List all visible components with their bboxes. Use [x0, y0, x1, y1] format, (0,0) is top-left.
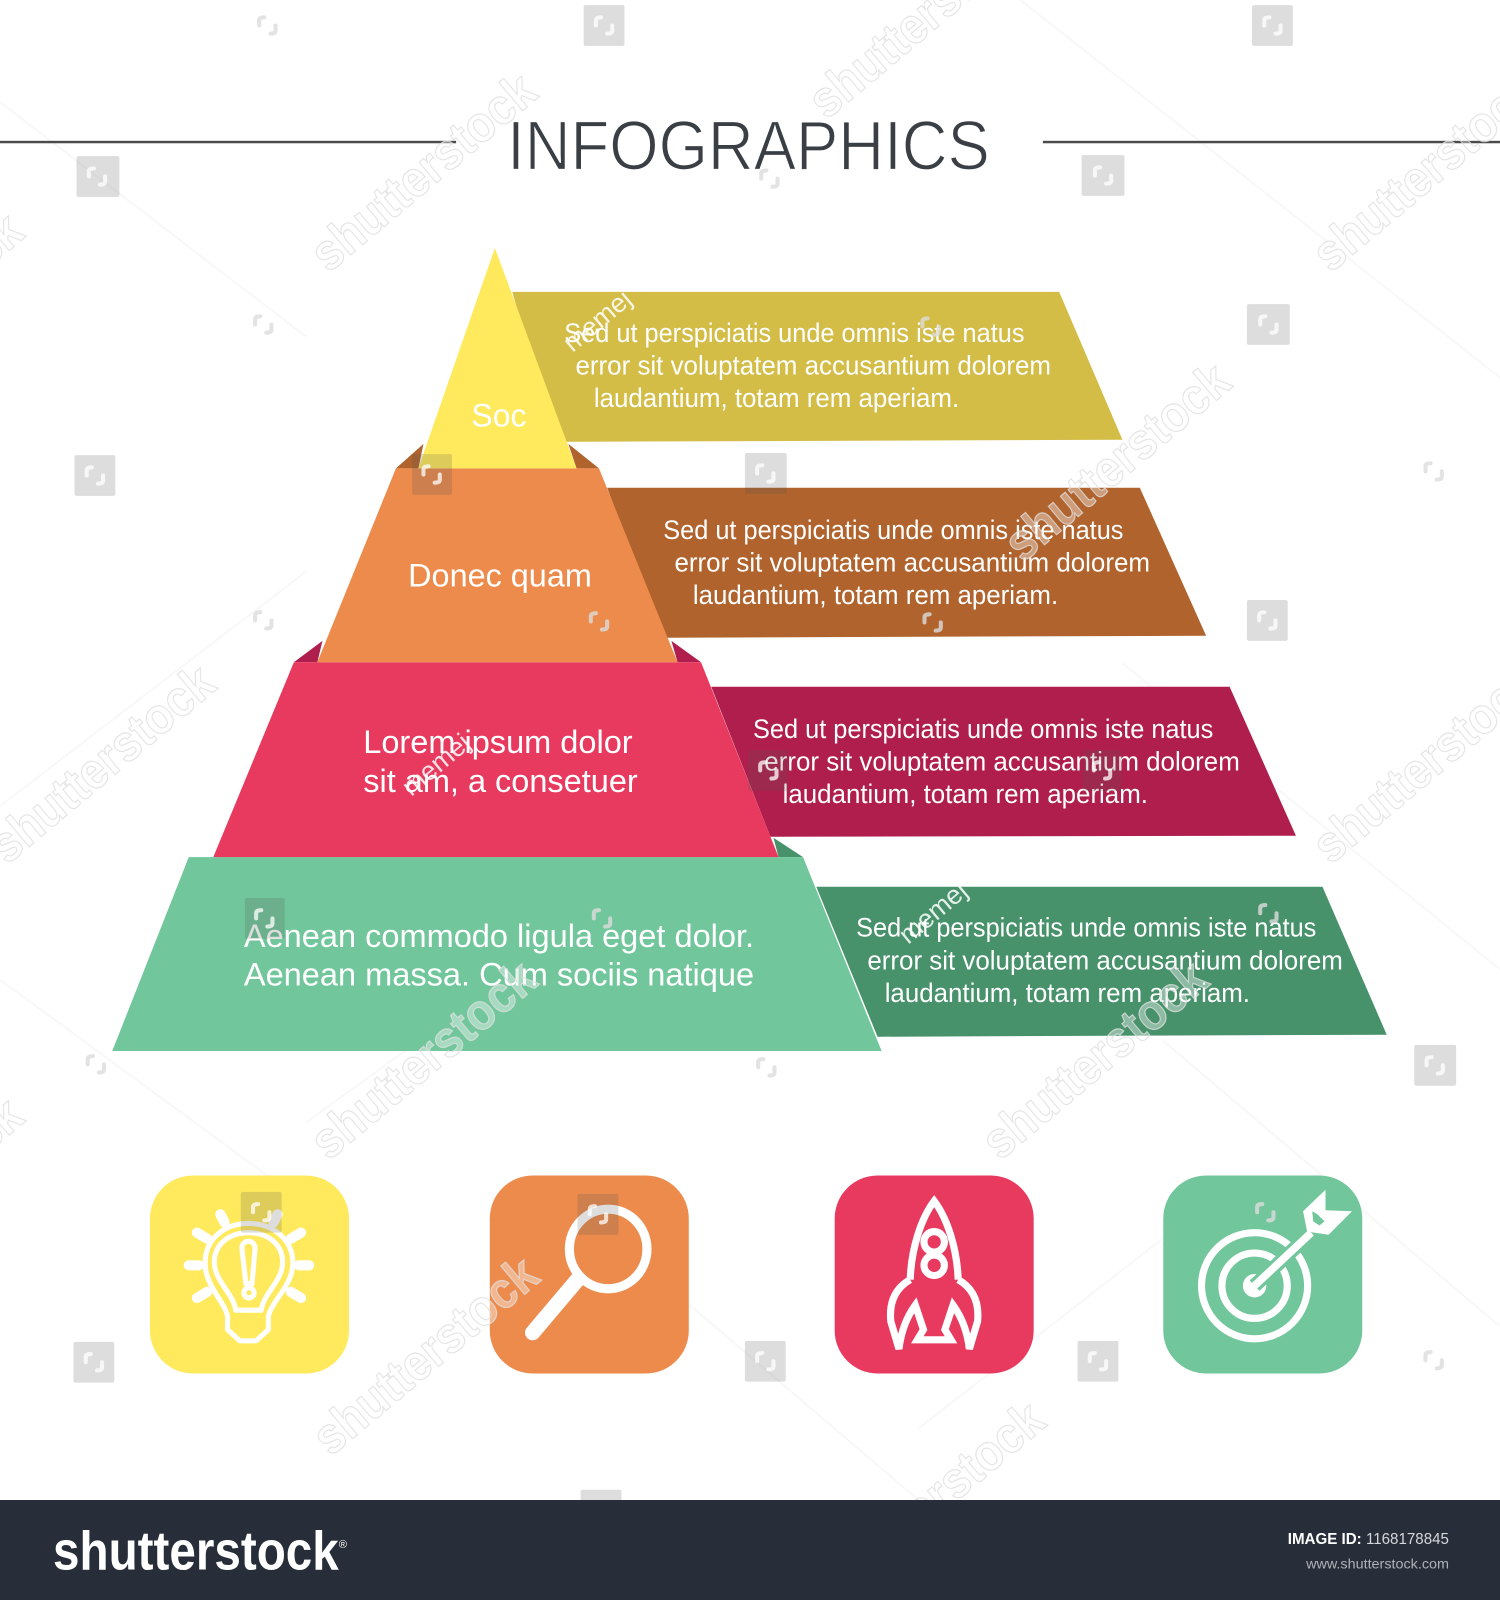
panel: band 3 crimson: Sed ut perspiciatis unde omnis iste natus	[753, 714, 1213, 744]
pyramid chart	[112, 248, 1387, 1051]
footer url: www.shutterstock.com	[1305, 1556, 1449, 1572]
pyramid level 2 orange	[317, 444, 678, 662]
panel: band 4 green: Sed ut perspiciatis unde omnis iste natus	[856, 913, 1316, 943]
footer logo: shutterstock	[53, 1519, 339, 1581]
panel: band 1 olive	[512, 292, 1122, 442]
title rule right	[1043, 141, 1500, 143]
watermark overlay: shutterstock	[299, 949, 547, 1170]
pyramid level 3 red	[213, 641, 779, 857]
footer image id: IMAGE ID: 1168178845	[1288, 1531, 1449, 1548]
icon: magnifier	[490, 1176, 689, 1373]
panel: band 4 green	[816, 887, 1387, 1037]
panel: band 3 crimson: error sit voluptatem accusantium dolorem	[764, 746, 1240, 776]
pyramid level 3 red: sit am, a consetuer	[363, 762, 638, 799]
panel: band 2 brown: Sed ut perspiciatis unde omnis iste natus	[663, 515, 1123, 545]
pyramid level 4 green: Aenean massa. Cum sociis natique	[244, 956, 754, 993]
watermark overlay: shutterstock	[299, 61, 547, 282]
watermark overlay: shutterstock	[301, 1244, 549, 1466]
panel: band 1 olive: Sed ut perspiciatis unde omnis iste natus	[564, 318, 1024, 348]
footer registered mark: ®	[339, 1539, 348, 1551]
watermark overlay: shutterstock	[993, 351, 1241, 572]
panel: band 2 brown	[607, 488, 1206, 638]
watermark overlay: memej	[893, 875, 973, 949]
icon: rocket	[835, 1176, 1034, 1373]
panel: band 3 crimson	[711, 687, 1296, 837]
watermark overlay: memej	[557, 284, 637, 358]
watermark overlay: shutterstock	[970, 949, 1219, 1170]
icon: light bulb	[150, 1176, 349, 1373]
pyramid level 4 green: Aenean commodo ligula eget dolor.	[244, 917, 754, 954]
pyramid level 4 green	[112, 838, 882, 1051]
icon: target with arrow	[1163, 1176, 1362, 1373]
pyramid level 1 yellow	[418, 248, 577, 468]
title text: INFOGRAPHICS	[507, 106, 990, 184]
pyramid level 2 orange: Donec quam	[408, 557, 592, 594]
pyramid level 1 yellow: Soc	[471, 397, 527, 434]
panel: band 4 green: error sit voluptatem accusantium dolorem	[867, 945, 1343, 975]
panel: band 2 brown: laudantium, totam rem aperiam.	[693, 580, 1058, 610]
watermark overlay: memej	[396, 727, 476, 802]
panel: band 1 olive: error sit voluptatem accusantium dolorem	[576, 350, 1051, 380]
panel: band 4 green: laudantium, totam rem aperiam.	[885, 978, 1250, 1008]
panel: band 3 crimson: laudantium, totam rem aperiam.	[783, 779, 1148, 809]
title rule left	[0, 141, 456, 143]
panel: band 2 brown: error sit voluptatem accusantium dolorem	[674, 547, 1150, 577]
footer bar	[0, 1500, 1500, 1600]
panel: band 1 olive: laudantium, totam rem aperiam.	[594, 383, 959, 413]
pyramid level 3 red: Lorem ipsum dolor	[363, 723, 633, 760]
